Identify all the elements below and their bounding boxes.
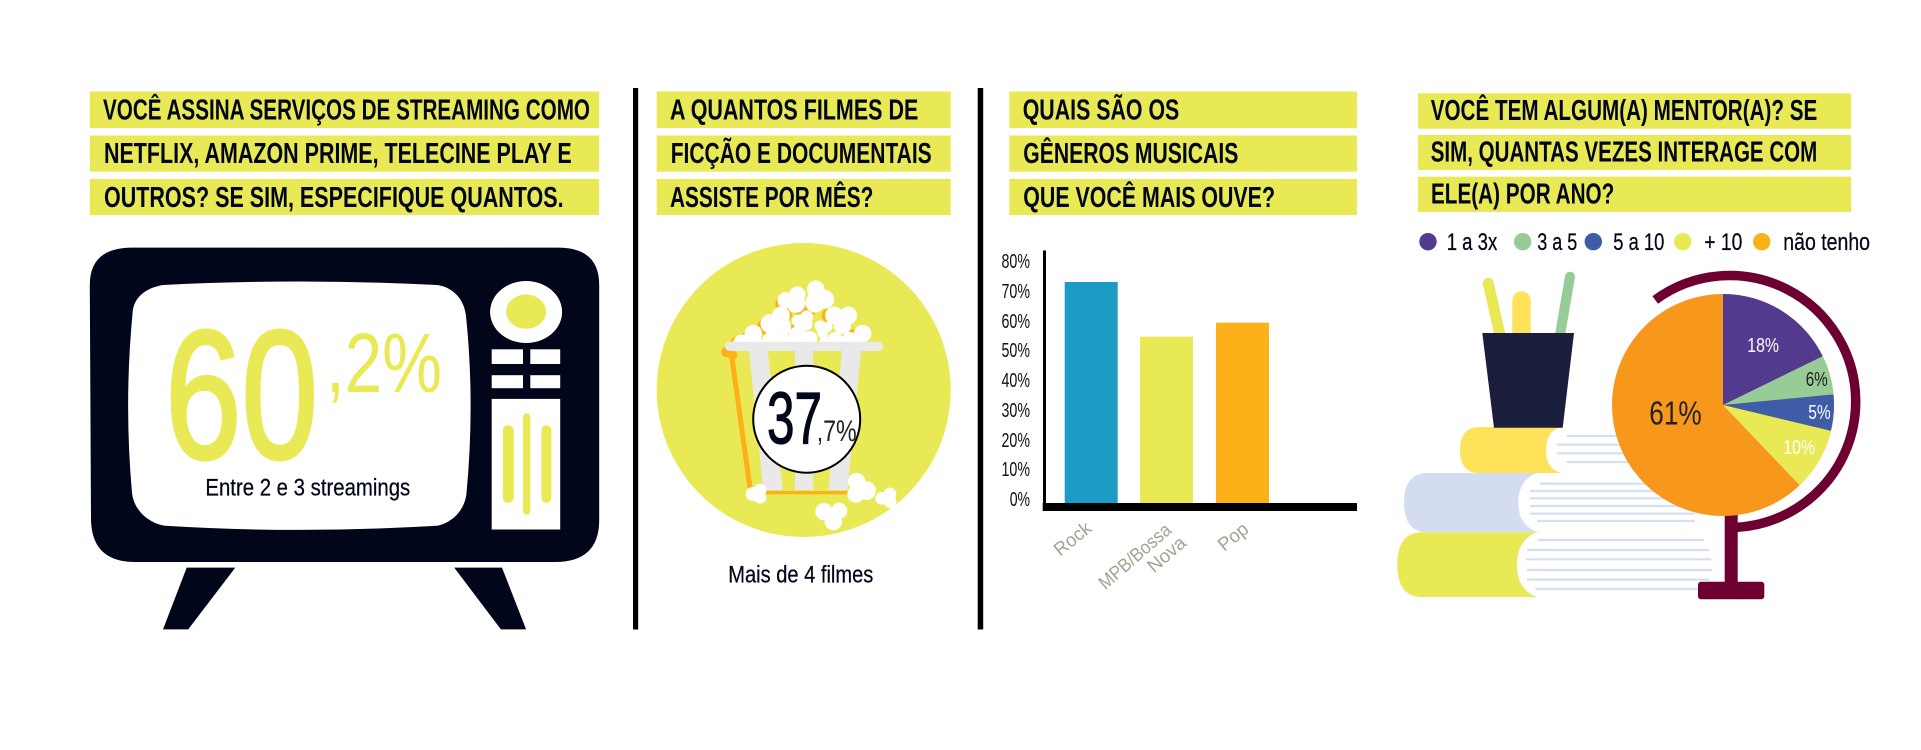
legend: 5 a 10	[1613, 229, 1664, 256]
stat: 60,2%: 60	[165, 292, 318, 497]
y axis labels: 80%	[1002, 251, 1030, 273]
icon: books	[1397, 427, 1717, 597]
y axis labels: 50%	[1002, 340, 1030, 362]
heading: films question: ASSISTE POR MÊS?	[670, 180, 873, 214]
icon: globe stand	[1655, 276, 1856, 599]
popcorn pile	[721, 281, 871, 360]
y axis labels	[1002, 251, 1030, 511]
heading: streaming question	[90, 92, 599, 215]
pie labels: 61%	[1649, 395, 1702, 432]
pie labels: 10%	[1783, 437, 1815, 459]
divider 2	[978, 88, 983, 630]
x axis labels: MPB/Bossa	[1095, 520, 1176, 594]
x axis labels: Pop	[1214, 519, 1253, 556]
panel: mentor	[1397, 93, 1870, 599]
heading: mentor question: ELE(A) POR ANO?	[1431, 178, 1614, 210]
y axis labels: 0%	[1010, 489, 1030, 511]
bar: Pop	[1216, 323, 1269, 503]
pie chart: mentor frequency	[1612, 294, 1834, 516]
bar chart: genres	[1002, 250, 1357, 594]
y axis labels: 30%	[1002, 400, 1030, 422]
heading: films question: A QUANTOS FILMES DE	[670, 95, 918, 127]
legend: + 10	[1704, 229, 1742, 256]
pie labels: 5%	[1808, 402, 1831, 424]
icon: pencil cup	[1482, 277, 1574, 428]
pie labels: 6%	[1806, 369, 1828, 391]
caption: streamings: Entre 2 e 3 streamings	[205, 474, 410, 502]
y axis labels: 60%	[1002, 311, 1030, 333]
stat badge: 37,7%	[753, 366, 860, 473]
slice: 1 a 3x	[1723, 294, 1823, 405]
fallen kernels	[746, 474, 896, 530]
panel: streaming	[90, 92, 599, 629]
stat: 60,2%: ,2%	[326, 316, 442, 410]
icon: popcorn	[721, 281, 896, 530]
background circle	[657, 243, 951, 537]
stat badge: 37,7%: 37	[767, 379, 822, 460]
bar: Rock	[1065, 282, 1118, 503]
legend	[1419, 229, 1870, 256]
heading: streaming question: VOCÊ ASSINA SERVIÇOS DE STREAMING COMO	[103, 93, 590, 127]
legend: 1 a 3x	[1447, 229, 1497, 256]
slice: 5 a 10	[1723, 394, 1834, 431]
panel: films	[657, 92, 951, 588]
heading: music question: QUAIS SÃO OS	[1023, 93, 1179, 127]
panel: music	[1002, 92, 1357, 594]
slice: 3 a 5	[1723, 356, 1834, 405]
y axis labels: 10%	[1002, 459, 1030, 481]
heading: films question: FICÇÃO E DOCUMENTAIS	[671, 136, 932, 170]
bar: MPB/Bossa Nova	[1140, 337, 1193, 503]
heading: mentor question	[1418, 93, 1851, 212]
divider 1	[633, 88, 638, 630]
x axis labels	[1050, 518, 1253, 594]
heading: streaming question: OUTROS? SE SIM, ESPECIFIQUE QUANTOS.	[104, 182, 564, 214]
heading: music question: GÊNEROS MUSICAIS	[1023, 136, 1238, 170]
y axis labels: 40%	[1002, 370, 1030, 392]
legend: 3 a 5	[1537, 229, 1577, 256]
caption: films: Mais de 4 filmes	[728, 561, 873, 588]
x axis labels: Nova	[1144, 532, 1191, 577]
heading: streaming question: NETFLIX, AMAZON PRIME, TELECINE PLAY E	[104, 138, 572, 170]
heading: music question	[1009, 92, 1357, 215]
pie labels	[1649, 335, 1831, 459]
x axis labels: Rock	[1050, 518, 1096, 561]
y axis labels: 70%	[1002, 281, 1030, 303]
legend: não tenho	[1783, 229, 1870, 256]
stat badge: 37,7%: ,7%	[817, 415, 857, 448]
heading: films question	[657, 92, 951, 215]
pie labels: 18%	[1747, 335, 1779, 357]
y axis labels: 20%	[1002, 430, 1030, 452]
slice: +10	[1723, 405, 1831, 485]
icon: television	[90, 248, 599, 629]
heading: music question: QUE VOCÊ MAIS OUVE?	[1023, 180, 1275, 214]
